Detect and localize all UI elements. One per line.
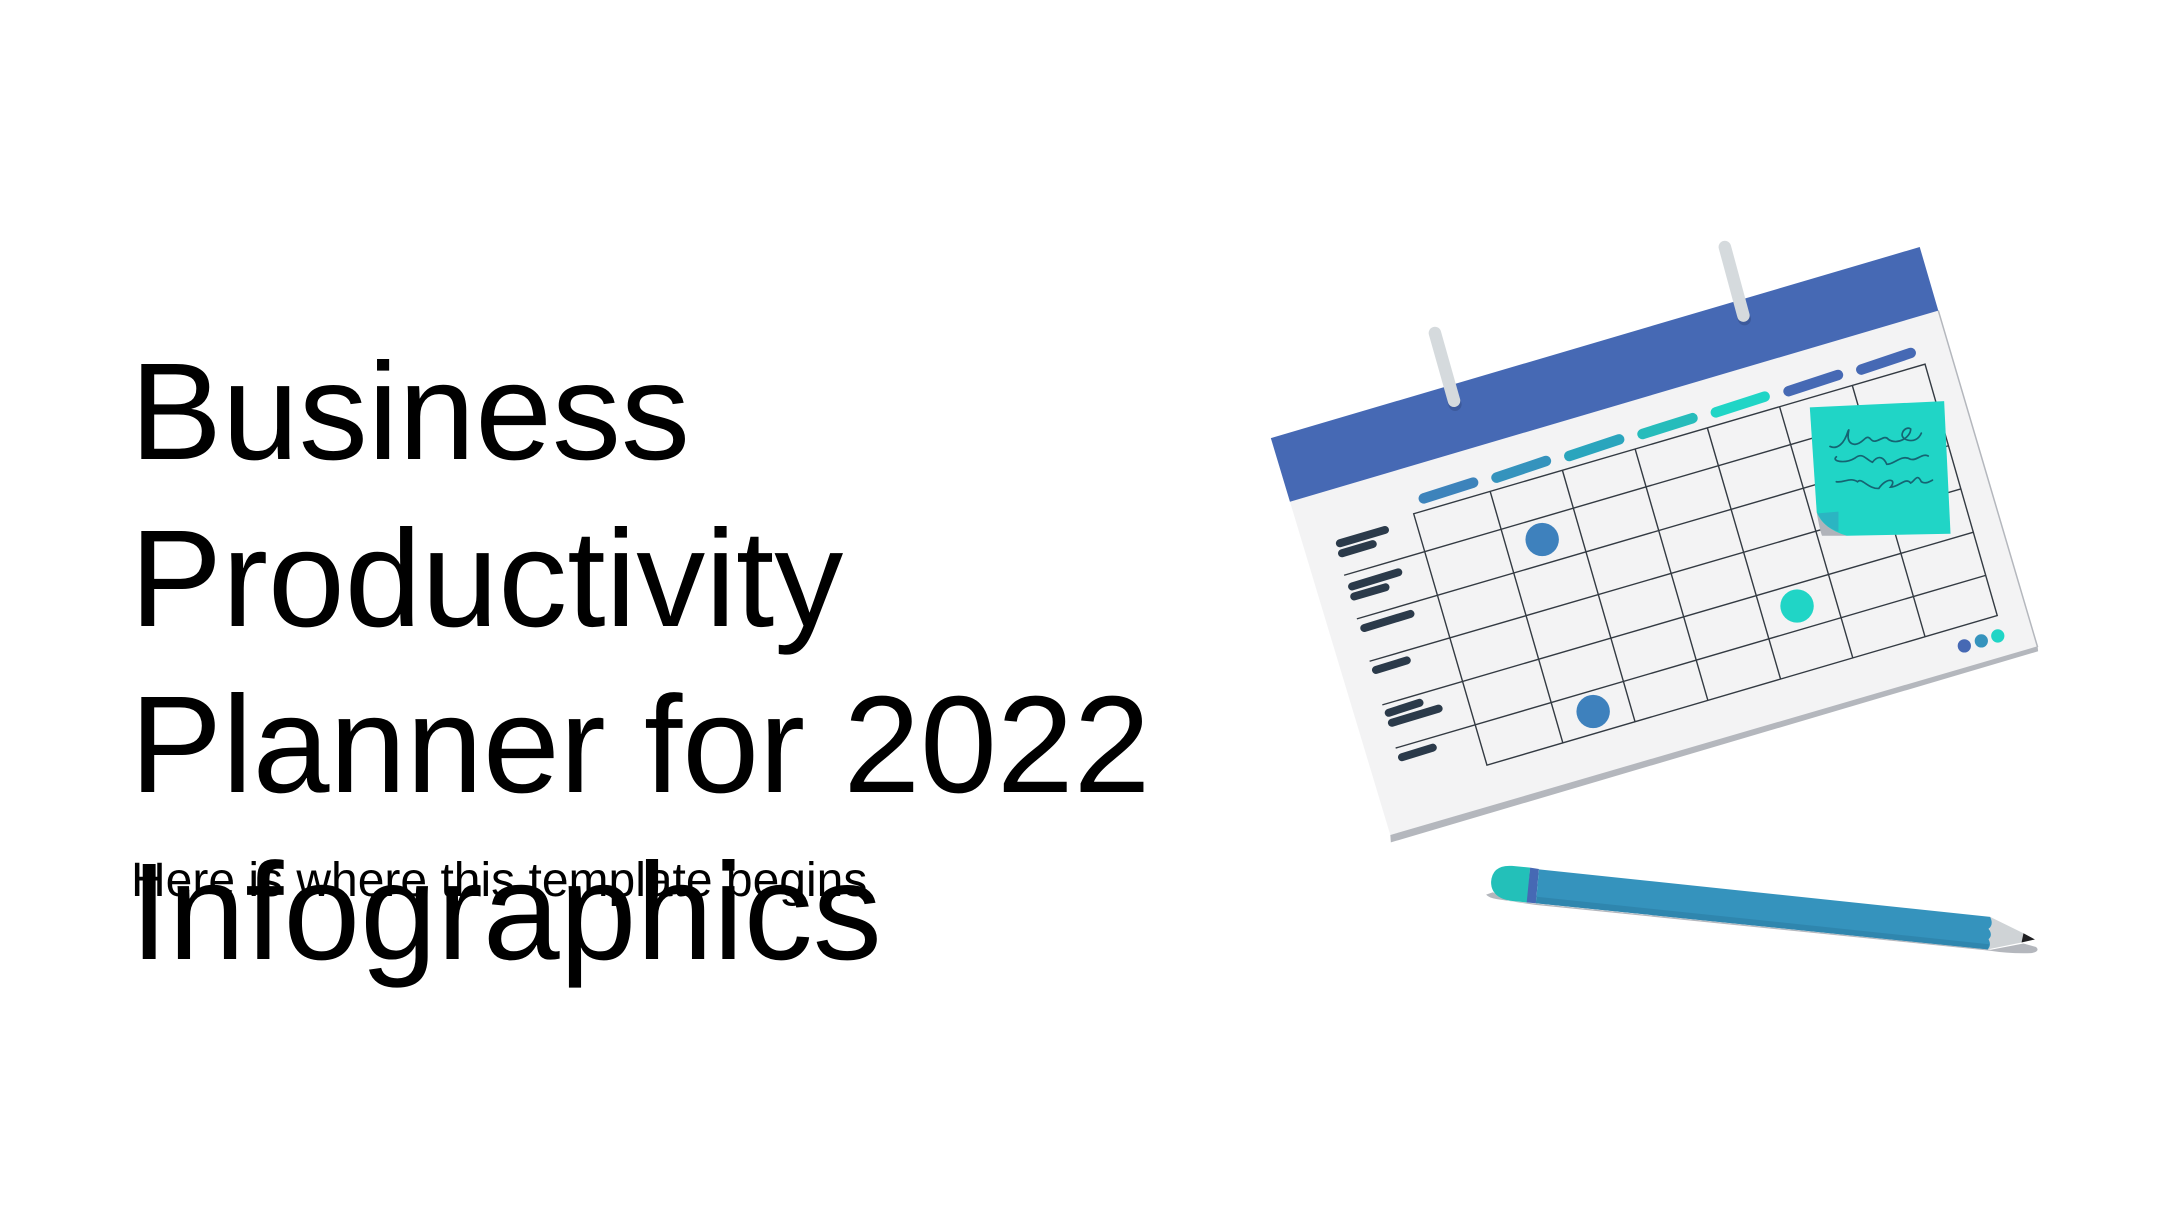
row label bars — [1340, 530, 1439, 757]
title: Infographics — [130, 834, 882, 988]
calendar page bottom edge shadow — [1390, 646, 2038, 842]
icon: calendar — [1271, 247, 2038, 842]
sticky note — [1810, 401, 1951, 536]
icon: pencil — [1486, 866, 2038, 953]
event markers — [1525, 523, 1814, 728]
pencil body — [1536, 869, 1992, 949]
pencil eraser — [1491, 866, 1530, 903]
title — [130, 335, 1150, 988]
pencil band — [1527, 868, 1539, 903]
calendar grid — [1344, 364, 1997, 765]
title: Planner for 2022 — [130, 668, 1150, 822]
calendar page — [1290, 311, 2038, 835]
subtitle: Here is where this template begins — [131, 854, 867, 907]
weekday header bars — [1424, 353, 1911, 498]
pencil shadow — [1486, 892, 2038, 953]
title: Business — [130, 335, 690, 489]
binding rings — [1435, 247, 1744, 404]
pencil graphite point — [2022, 933, 2035, 943]
pencil wood tip — [1988, 917, 2023, 949]
calendar blue header — [1271, 247, 1938, 502]
title: Productivity — [130, 502, 843, 656]
pagination dots — [1958, 629, 2004, 653]
